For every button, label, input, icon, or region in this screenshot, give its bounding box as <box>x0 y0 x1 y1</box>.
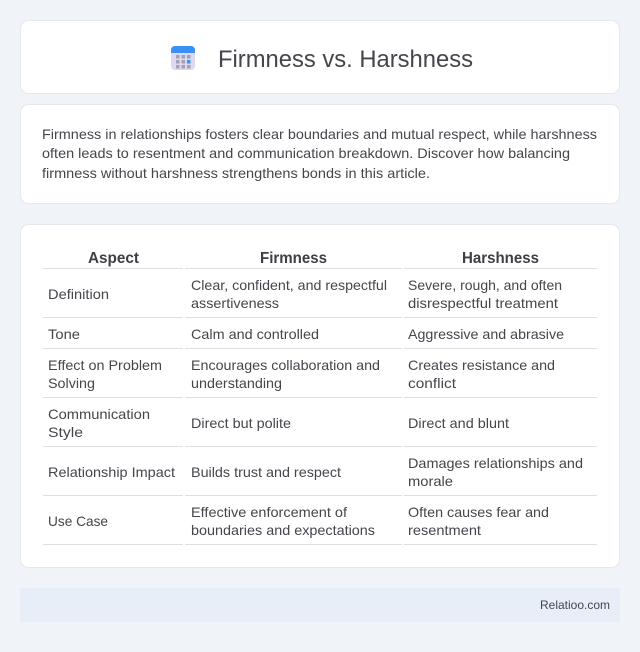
text block: intro paragraph <box>42 126 597 181</box>
icon: calendar <box>171 46 195 70</box>
title: Firmness vs. Harshness <box>218 46 473 73</box>
row: relationship impact: Builds trust and respect <box>191 464 341 480</box>
row: effect on problem solving: Creates resistance and <box>408 357 555 373</box>
text block: intro paragraph: Firmness in relationships fosters clear boundaries and mutual respect, while harshness <box>42 126 597 142</box>
panel: introduction <box>20 104 620 204</box>
row: communication style: Direct but polite <box>191 415 291 431</box>
footer: Relatioo.com <box>540 598 610 612</box>
row: tone: Aggressive and abrasive <box>408 326 564 342</box>
table header: Firmness <box>260 250 327 267</box>
row: use case: Often causes fear and <box>408 504 549 520</box>
row: effect on problem solving: understanding <box>191 375 282 391</box>
row: relationship impact: Relationship Impact <box>48 464 175 480</box>
panel: title card <box>20 20 620 94</box>
row: effect on problem solving: Effect on Problem <box>48 357 162 373</box>
row: definition <box>48 277 562 311</box>
row: effect on problem solving: Solving <box>48 375 95 391</box>
row: use case: resentment <box>408 522 481 538</box>
row: relationship impact <box>48 455 583 489</box>
row: relationship impact: morale <box>408 473 453 489</box>
row: relationship impact: Damages relationships and <box>408 455 583 471</box>
row: definition: disrespectful treatment <box>408 295 558 311</box>
row: tone <box>48 326 564 342</box>
row: use case: boundaries and expectations <box>191 522 375 538</box>
row: communication style <box>48 406 509 440</box>
row: communication style: Direct and blunt <box>408 415 509 431</box>
row: communication style: Style <box>48 424 83 440</box>
row: tone: Calm and controlled <box>191 326 319 342</box>
text block: intro paragraph: firmness without harshness strengthens bonds in this article. <box>42 165 430 181</box>
row: communication style: Communication <box>48 406 150 422</box>
row: effect on problem solving: conflict <box>408 375 456 391</box>
row: use case <box>48 504 549 538</box>
row: definition: Clear, confident, and respectful <box>191 277 387 293</box>
row: definition: Severe, rough, and often <box>408 277 562 293</box>
footer <box>20 588 620 622</box>
table header: Aspect <box>88 250 140 267</box>
row: definition: Definition <box>48 286 109 302</box>
panel: comparison table <box>20 224 620 568</box>
text block: intro paragraph: often leads to resentment and communication breakdown. Discover how balancing <box>42 145 570 161</box>
row: effect on problem solving: Encourages collaboration and <box>191 357 380 373</box>
table header: Harshness <box>462 250 539 267</box>
row: use case: Effective enforcement of <box>191 504 347 520</box>
row: effect on problem solving <box>48 357 555 391</box>
table header <box>88 250 539 267</box>
row: use case: Use Case <box>48 513 108 529</box>
row: tone: Tone <box>48 326 80 342</box>
row: definition: assertiveness <box>191 295 279 311</box>
